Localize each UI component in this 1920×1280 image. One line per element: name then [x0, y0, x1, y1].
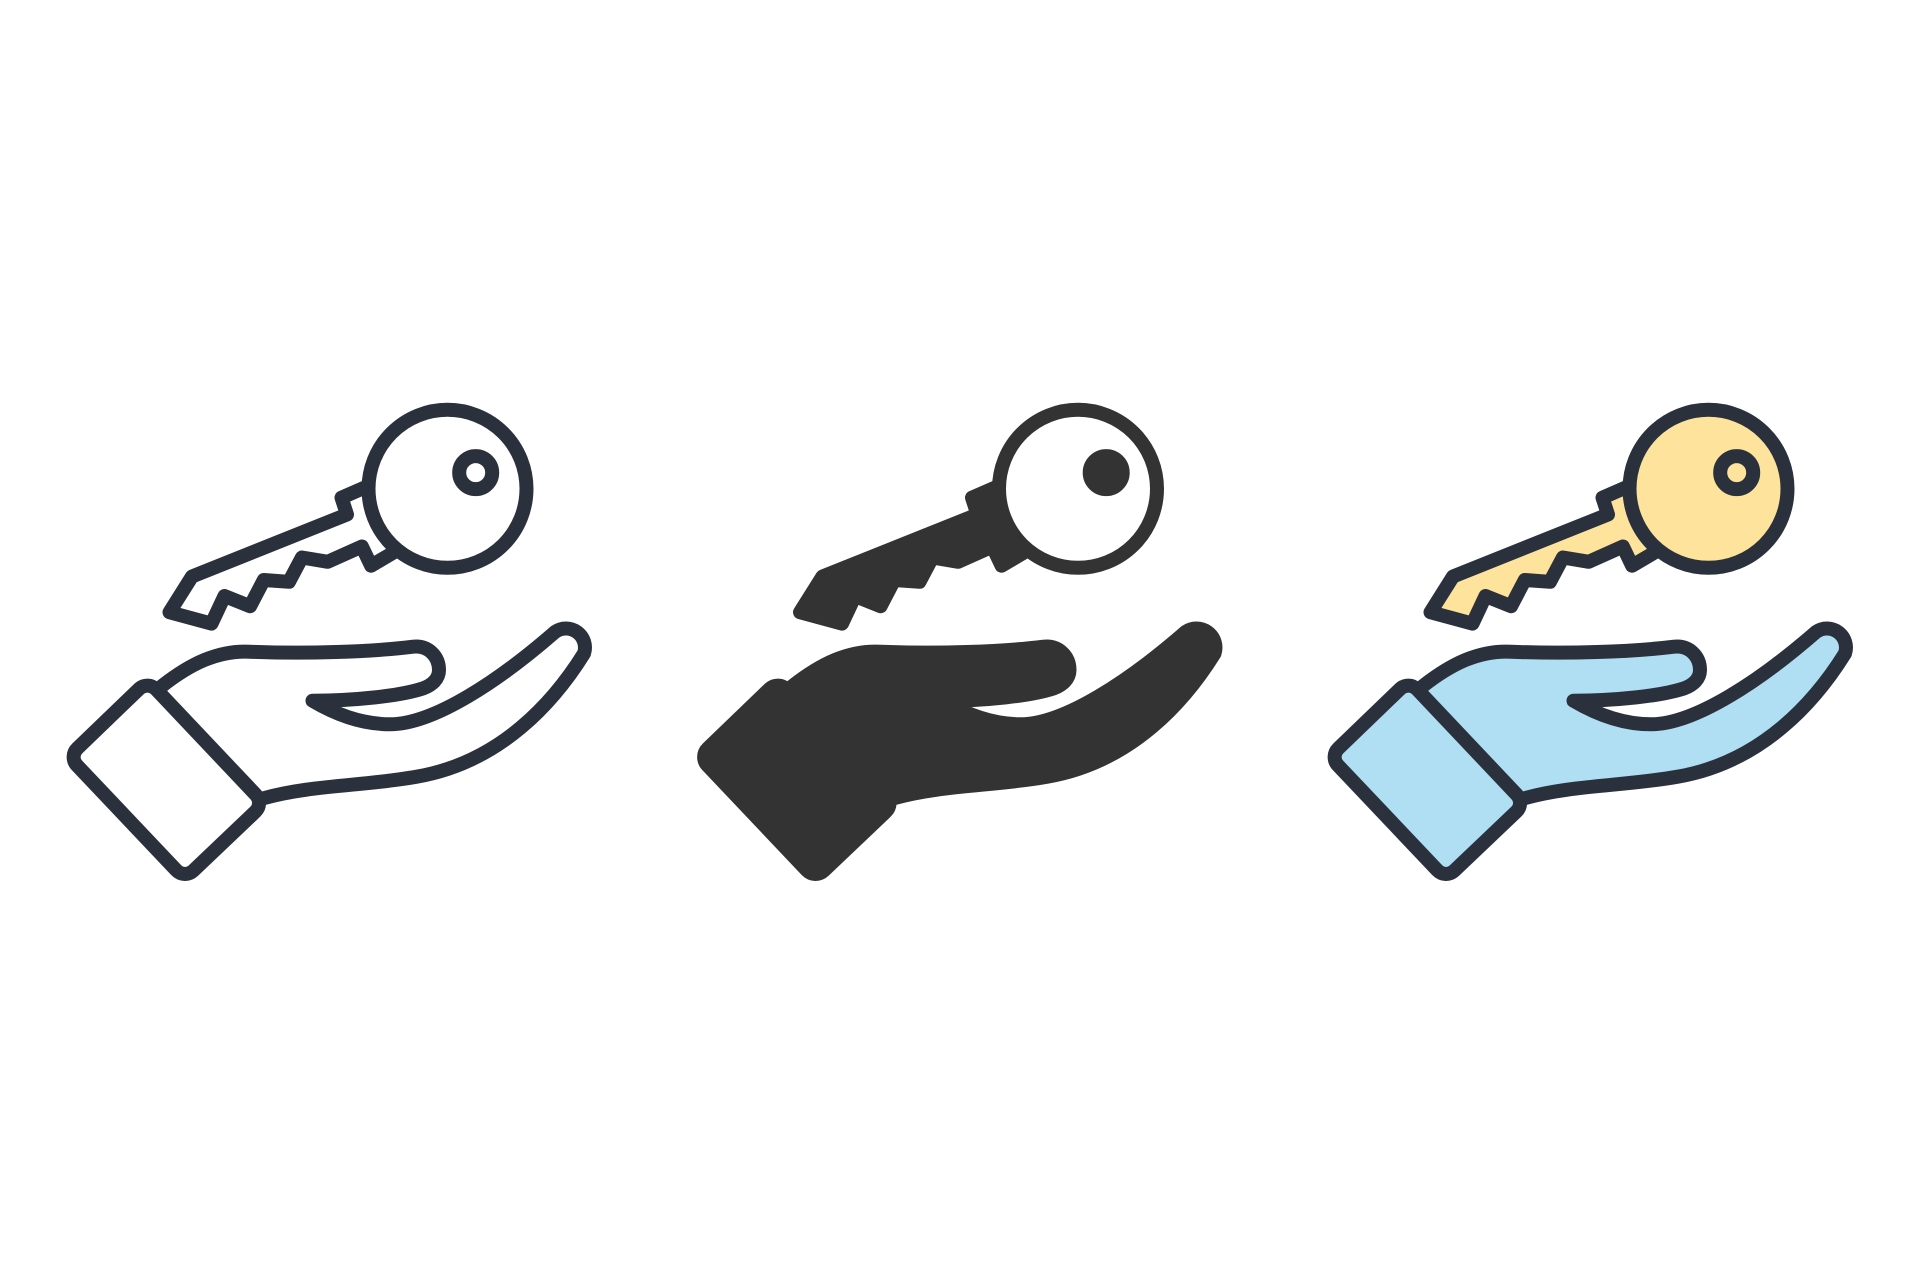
solid key hole	[1090, 456, 1123, 489]
yellow key hole	[1720, 456, 1753, 489]
icon: outline hand and key	[74, 410, 585, 874]
solid sleeve cuff	[704, 686, 890, 874]
key blade outline	[170, 486, 395, 624]
solid key blade	[800, 486, 1026, 624]
sleeve cuff	[74, 686, 259, 874]
yellow key head	[1630, 410, 1788, 568]
icon: solid hand and key	[704, 410, 1215, 874]
icon: coloured hand and key	[1335, 410, 1846, 874]
key head ring	[368, 410, 526, 568]
blue hand	[1423, 629, 1846, 798]
key hole	[459, 456, 492, 489]
yellow key blade	[1430, 486, 1656, 624]
blue sleeve cuff	[1335, 686, 1520, 874]
hand outline	[162, 629, 585, 798]
solid key head ring	[999, 410, 1157, 568]
solid hand	[792, 629, 1215, 798]
